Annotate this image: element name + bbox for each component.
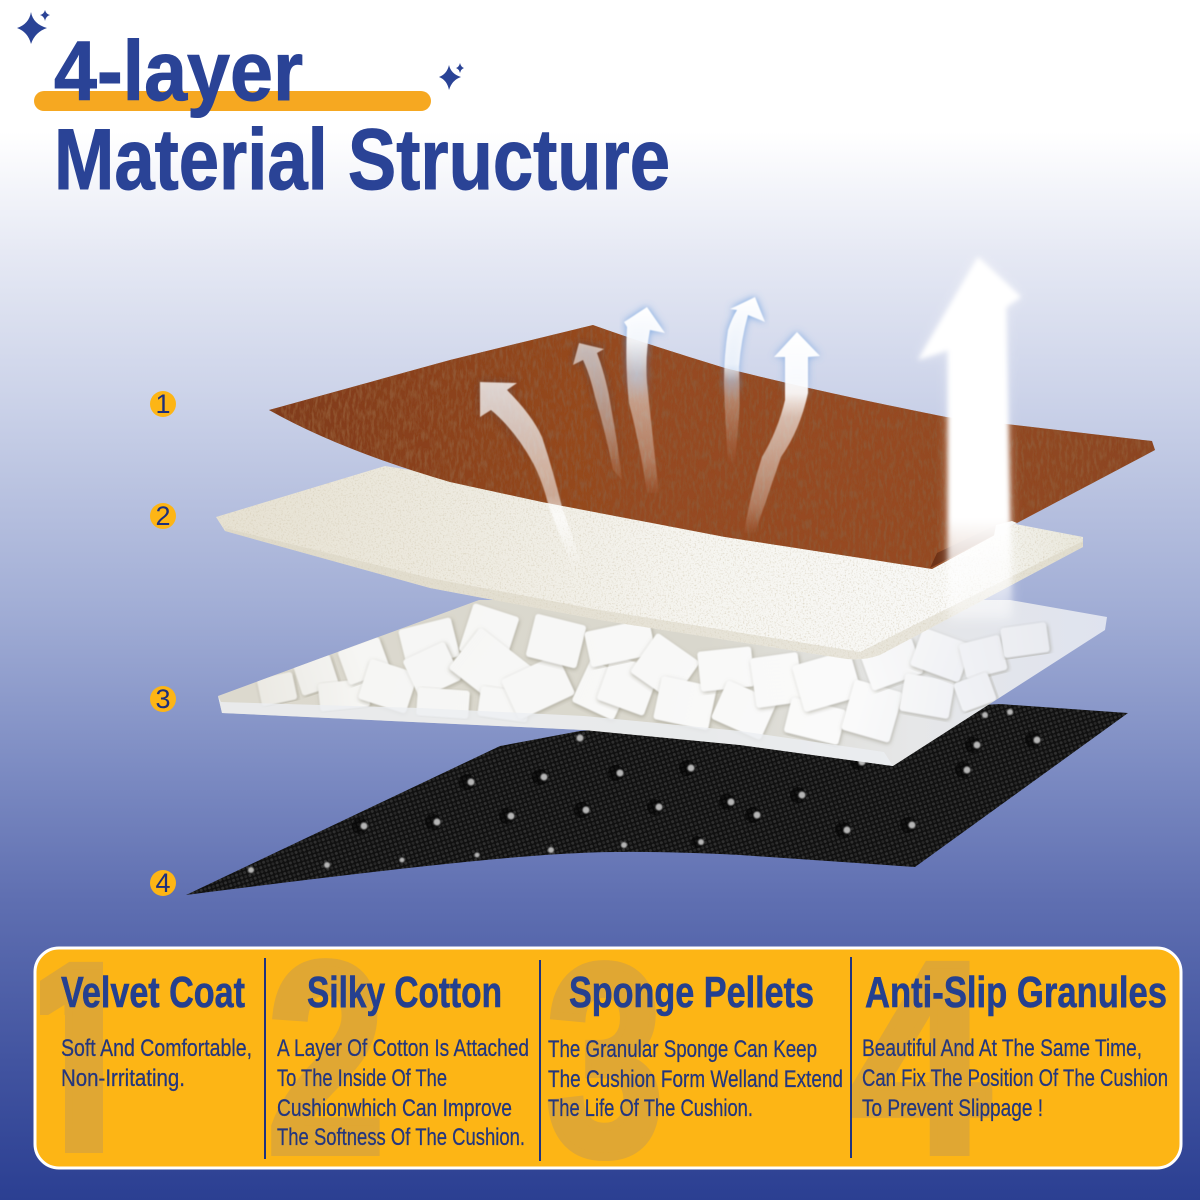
column 1: Velvet Coat: Non-Irritating.: [61, 1065, 185, 1092]
icon: sparkle top left: [17, 10, 50, 44]
pellet cubes: [260, 607, 1046, 742]
column dividers: [264, 957, 852, 1161]
number badge 2: 2: [155, 501, 171, 531]
column 2: Silky Cotton: Cushionwhich Can Improve: [277, 1095, 512, 1122]
number badge 3: 3: [155, 684, 171, 714]
column 3: Sponge Pellets: The Cushion Form Welland Extend: [548, 1066, 843, 1093]
white notch: [994, 521, 1017, 536]
arrow: curved 5: [744, 332, 820, 533]
layer 3: sponge pellets: [218, 600, 1107, 766]
number badge 4: 4: [155, 868, 171, 898]
arrow: curved 3: [624, 307, 665, 493]
velvet side thickness: [930, 525, 996, 568]
anti-slip granules: [248, 709, 1040, 873]
column 1: Velvet Coat: Soft And Comfortable,: [61, 1035, 252, 1062]
cotton lower edge shading: [225, 528, 1083, 659]
arrow: large upward arrow: [918, 257, 1021, 620]
translucent sponge bottom edge: [218, 696, 893, 766]
icon: sparkle near title: [439, 63, 464, 90]
column 1: Velvet Coat: [61, 968, 252, 1092]
column 4: Anti-Slip Granules: [862, 968, 1168, 1122]
column 3: Sponge Pellets: [548, 968, 843, 1122]
number badge 4: [150, 868, 176, 898]
number badge 3: [150, 684, 176, 714]
title line 2: Material Structure: [54, 112, 670, 208]
layer 1: velvet coat: [269, 325, 1155, 569]
arrow: curved 2: [573, 343, 622, 480]
column 2: Silky Cotton: [277, 968, 529, 1151]
column 2: Silky Cotton: To The Inside Of The: [277, 1065, 447, 1092]
column 1: Velvet Coat: Velvet Coat: [61, 968, 245, 1017]
number badge 1: [150, 389, 176, 419]
column 3: Sponge Pellets: Sponge Pellets: [569, 968, 814, 1017]
column 2: Silky Cotton: The Softness Of The Cushion.: [277, 1124, 525, 1151]
arrow: curved 1: [480, 382, 583, 567]
column 2: Silky Cotton: Silky Cotton: [307, 968, 502, 1017]
arrow: curved 4: [724, 297, 765, 463]
column 3: Sponge Pellets: The Life Of The Cushion.: [548, 1095, 753, 1122]
column 4: Anti-Slip Granules: To Prevent Slippage !: [862, 1095, 1043, 1122]
title block: [34, 24, 670, 208]
title line 1: 4-layer: [54, 24, 303, 118]
layer 2: silky cotton: [216, 466, 1083, 659]
column 3: Sponge Pellets: The Granular Sponge Can Keep: [548, 1036, 817, 1063]
panel: material descriptions: [34, 946, 1182, 1170]
title underline bar: [34, 91, 431, 111]
anti-slip granule halos: [352, 732, 1041, 848]
number badge 2: [150, 501, 176, 531]
number badge 1: 1: [155, 389, 171, 419]
column 2: Silky Cotton: A Layer Of Cotton Is Attached: [277, 1035, 529, 1062]
watermark numbers: [40, 958, 992, 1161]
layer 4: black anti-slip base: [186, 704, 1128, 895]
